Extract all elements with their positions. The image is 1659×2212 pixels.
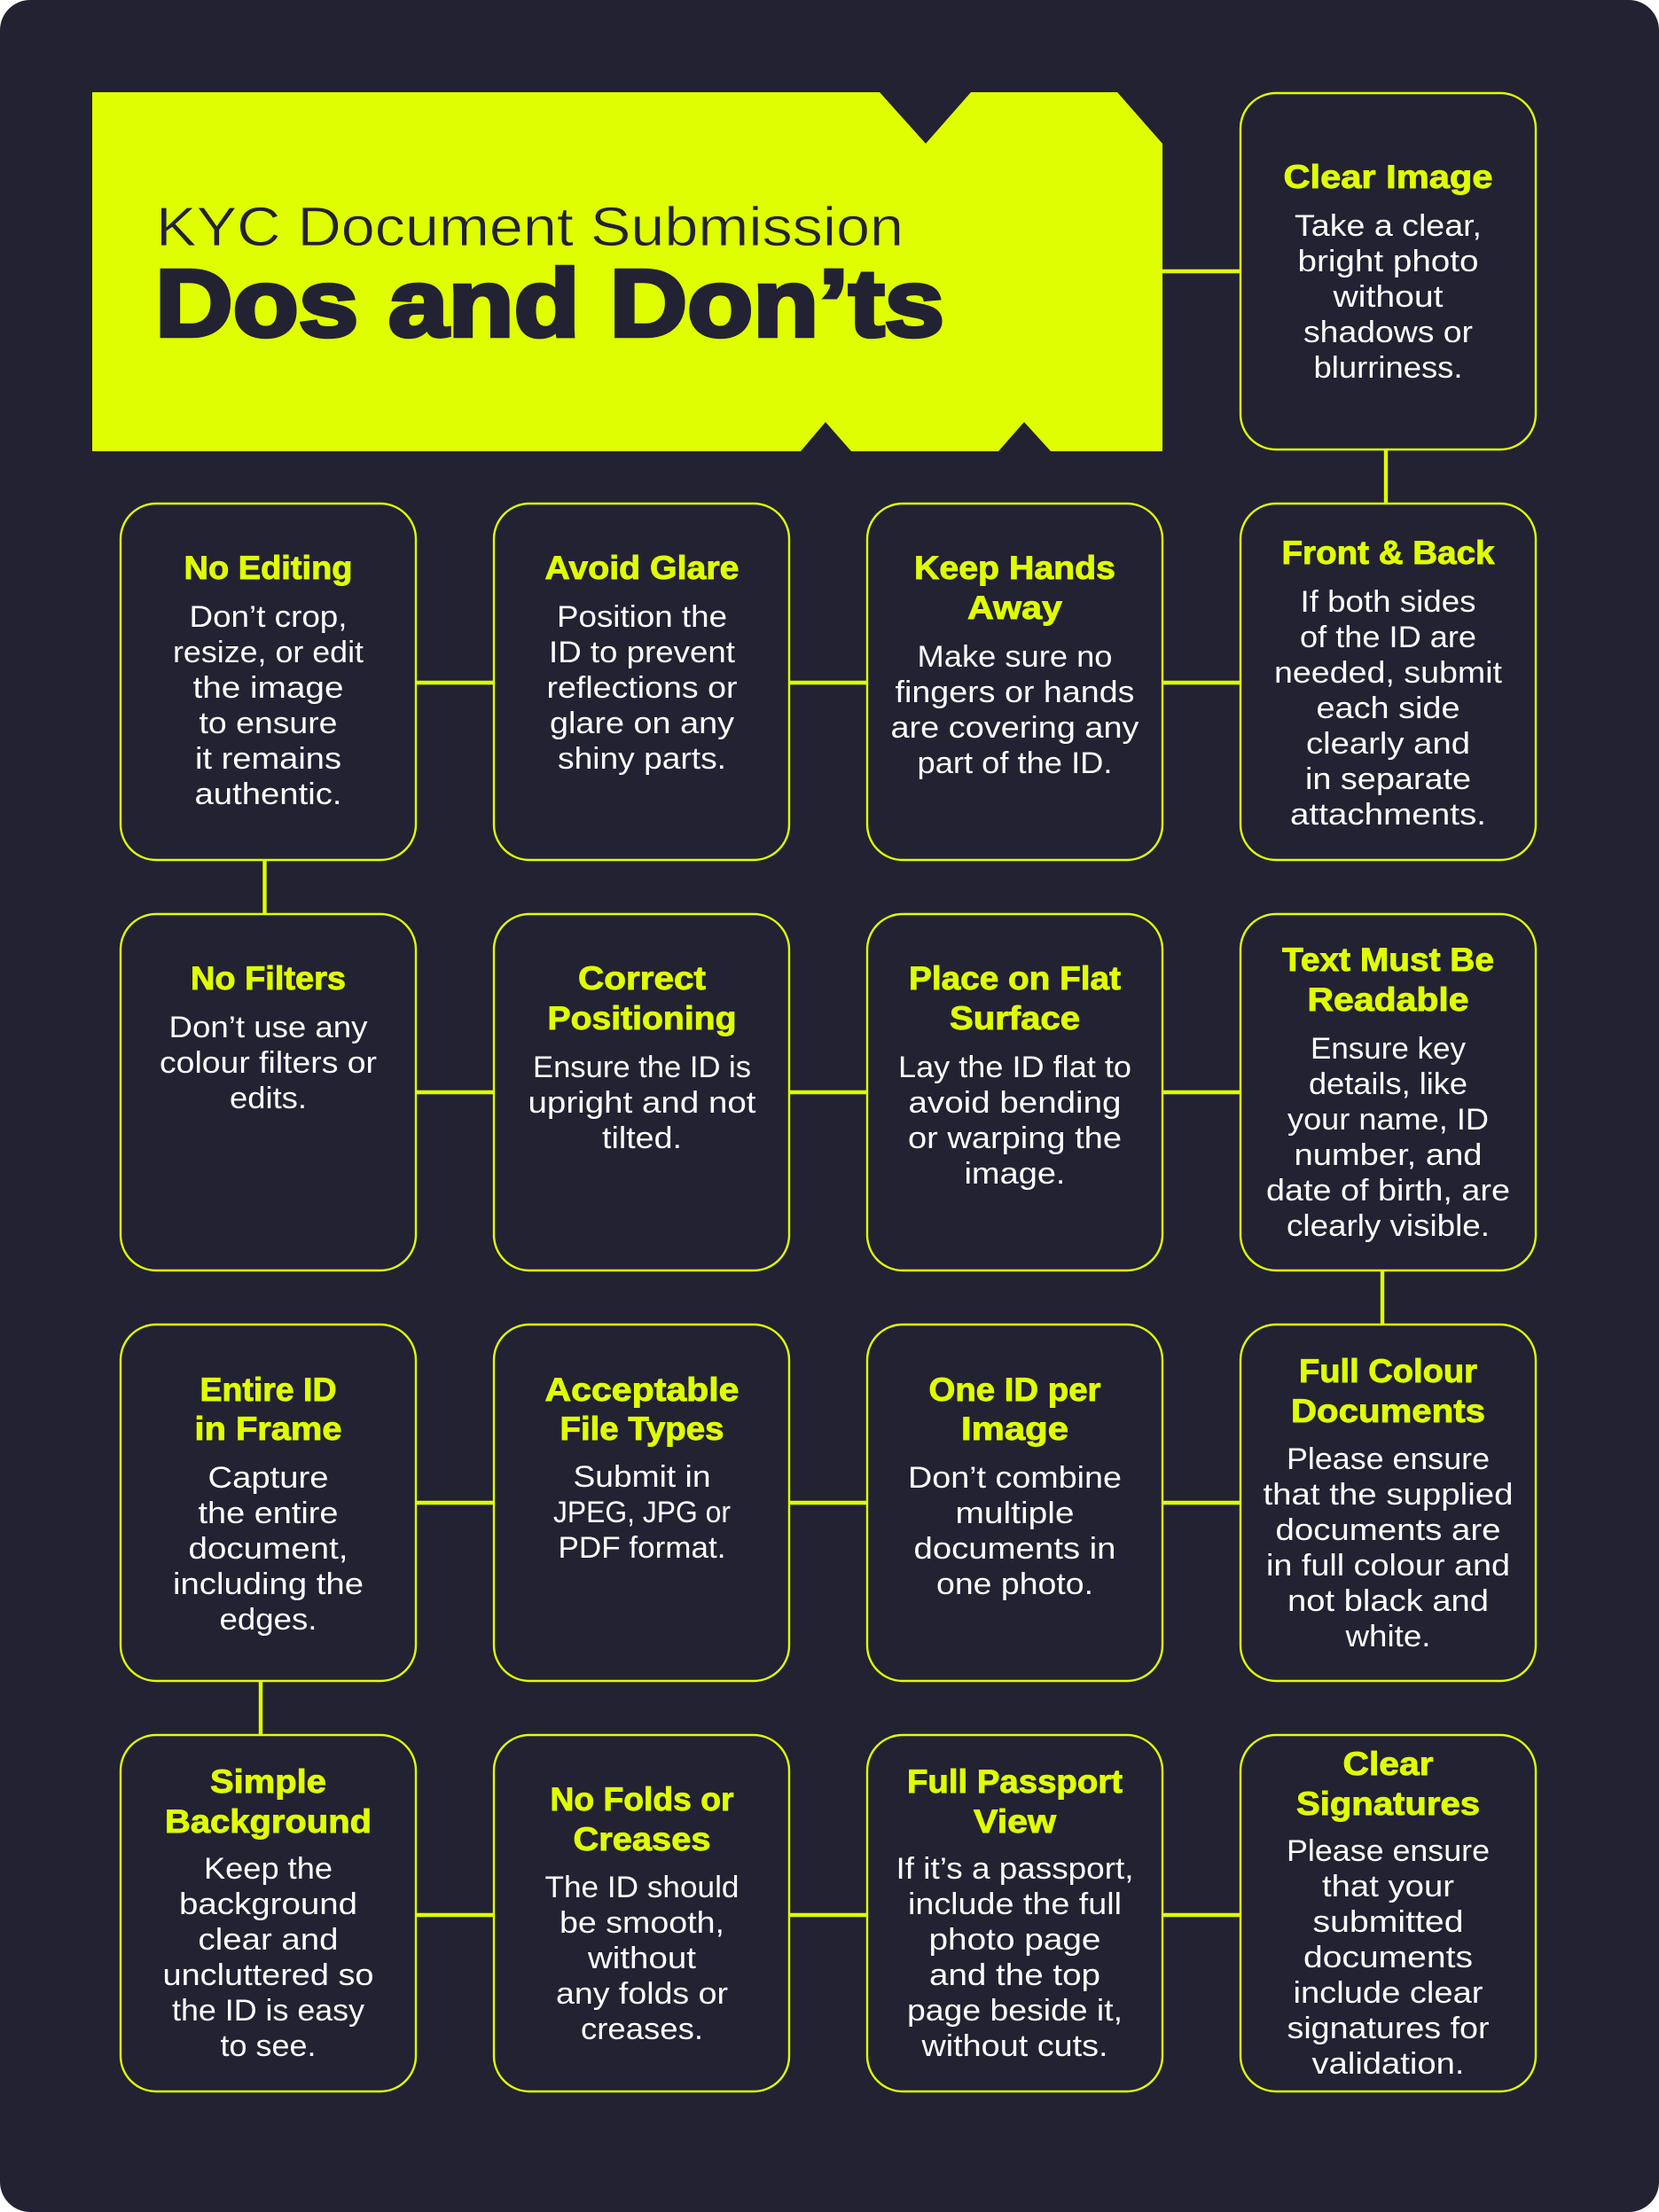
body text: Please ensure [1287,1442,1490,1476]
body text: edits. [230,1082,307,1115]
heading: Creases [573,1821,711,1857]
card: Full Passport View [867,1735,1162,2091]
body text: blurriness. [1314,351,1463,385]
heading [165,1763,372,1840]
body text: upright and not [528,1086,756,1120]
body text [1263,1442,1513,1653]
body text: reflections or [546,671,738,705]
body text: in separate [1305,762,1471,796]
card: Clear Image [1240,93,1536,449]
body text: including the [173,1567,364,1601]
heading: Correct [578,960,706,997]
heading: Positioning [548,1000,736,1036]
heading [1296,1746,1480,1822]
body text: to ensure [199,707,337,740]
card: No Editing [121,504,416,860]
body text [890,640,1139,780]
body text: include the full [908,1888,1122,1921]
heading: Simple [210,1763,326,1800]
heading: Image [961,1411,1068,1447]
body text: Please ensure [1287,1834,1490,1868]
body text: validation. [1312,2047,1465,2081]
body text: include clear [1293,1976,1483,2010]
card: Text Must Be Readable [1240,914,1536,1270]
heading [1291,1353,1485,1429]
body text [173,1461,364,1637]
body text: the image [193,671,344,705]
body text: the ID is easy [172,1994,364,2028]
body text: and the top [929,1958,1100,1992]
body text: Submit in [573,1460,711,1494]
body text: photo page [929,1923,1101,1957]
body text: submitted [1312,1905,1463,1939]
heading [909,960,1121,1036]
heading: Signatures [1296,1786,1480,1822]
body text: the entire [199,1497,339,1530]
heading: No Filters [191,960,346,997]
body text: documents in [913,1532,1115,1566]
body text: tilted. [602,1122,682,1155]
body text [896,1852,1133,2063]
card: Full Colour Documents [1240,1325,1536,1681]
body text: clearly and [1306,727,1470,761]
heading: View [974,1803,1056,1840]
body text: are covering any [890,711,1139,745]
body text: Make sure no [917,640,1112,674]
body text: resize, or edit [173,636,364,669]
body text: If it’s a passport, [896,1852,1133,1886]
body text: date of birth, are [1266,1174,1510,1208]
body text: in full colour and [1266,1549,1510,1583]
body text: The ID should [544,1871,740,1904]
body text: or warping the [908,1122,1122,1155]
banner shape [92,92,1162,451]
body text [1266,1032,1510,1243]
body text: glare on any [550,707,734,740]
body text [173,600,364,811]
card: Place on Flat Surface [867,914,1162,1270]
card: Clear Signatures [1240,1735,1536,2091]
body text: PDF format. [559,1531,725,1565]
body text: image. [965,1157,1066,1191]
body text: fingers or hands [896,676,1135,709]
body text: shiny parts. [558,742,726,776]
body text: document, [188,1532,348,1566]
heading: No Editing [184,550,353,586]
heading: Clear [1342,1746,1433,1782]
card: Acceptable File Types [494,1325,789,1681]
body text: page beside it, [907,1994,1123,2028]
heading: Full Colour [1299,1353,1477,1389]
body text [908,1461,1122,1601]
heading: Readable [1307,981,1468,1018]
body text [544,1871,740,2046]
body text: attachments. [1290,798,1486,832]
title banner [92,92,1162,451]
body text: Take a clear, [1295,209,1482,243]
heading: Away [967,590,1062,626]
heading: Keep Hands [914,550,1115,586]
body text: If both sides [1300,585,1475,619]
title line 2: Dos and Don’ts [155,249,944,356]
heading: Clear Image [1284,159,1493,195]
card: No Filters [121,914,416,1270]
body text: JPEG, JPG or [553,1496,731,1529]
heading: Surface [950,1000,1080,1036]
card: One ID per Image [867,1325,1162,1681]
body text: colour filters or [160,1046,377,1080]
body text: shadows or [1303,316,1473,349]
body text: white. [1344,1620,1431,1653]
heading [195,1372,342,1447]
card: No Folds or Creases [494,1735,789,2091]
body text: your name, ID [1287,1103,1489,1137]
body text [553,1460,731,1565]
body text: authentic. [195,778,342,811]
body text: Capture [207,1461,328,1495]
body text: multiple [956,1497,1075,1530]
body text [546,600,738,776]
title line 1: KYC Document Submission [156,197,904,258]
card: Correct Positioning [494,914,789,1270]
heading: Documents [1291,1393,1485,1429]
body text: background [179,1888,357,1921]
heading: Place on Flat [909,960,1121,997]
card: Avoid Glare [494,504,789,860]
body text: Position the [557,600,727,634]
body text: any folds or [556,1977,728,2011]
body text: details, like [1309,1067,1467,1101]
body text: clear and [199,1923,339,1957]
body text: be smooth, [560,1906,724,1940]
card: Simple Background [121,1735,416,2091]
body text [163,1852,374,2063]
body text: Ensure key [1311,1032,1466,1066]
heading [1282,942,1494,1018]
body text: creases. [581,2013,703,2046]
body text: Don’t combine [908,1461,1122,1495]
body text [898,1051,1131,1191]
body text: uncluttered so [163,1958,374,1992]
heading [929,1372,1101,1447]
heading [907,1763,1123,1840]
body text: Don’t crop, [190,600,348,634]
heading: Avoid Glare [544,550,740,586]
body text: clearly visible. [1287,1209,1490,1243]
body text [1274,585,1503,832]
heading: One ID per [929,1372,1101,1408]
heading: Background [165,1803,372,1840]
body text: without [587,1942,697,1975]
body text: not black and [1287,1584,1489,1618]
body text: needed, submit [1274,656,1503,690]
body text: without cuts. [920,2029,1108,2063]
body text: Lay the ID flat to [898,1051,1131,1084]
body text: each side [1316,692,1459,725]
body text: to see. [220,2029,316,2063]
body text: avoid bending [908,1086,1121,1120]
body text: documents are [1275,1513,1500,1547]
body text [1295,209,1482,385]
body text: it remains [195,742,341,776]
heading [914,550,1115,626]
body text: without [1332,280,1444,314]
body text: Don’t use any [168,1011,367,1044]
body text: part of the ID. [917,746,1112,780]
body text [1287,1834,1490,2081]
body text: that the supplied [1263,1478,1513,1512]
body text: number, and [1295,1138,1483,1172]
body text [528,1051,756,1155]
body text: documents [1303,1941,1473,1974]
heading: Entire ID [200,1372,337,1408]
body text [160,1011,377,1115]
body text: Keep the [204,1852,333,1886]
card: Entire ID in Frame [121,1325,416,1681]
body text: one photo. [936,1567,1093,1601]
body text: signatures for [1287,2012,1490,2045]
body text: Ensure the ID is [533,1051,751,1084]
card: Front & Back [1240,504,1536,860]
heading: Text Must Be [1282,942,1494,978]
heading: Acceptable [544,1372,740,1408]
body text: that your [1322,1870,1454,1903]
heading: Front & Back [1282,535,1495,571]
body text: edges. [220,1603,317,1637]
body text: bright photo [1298,245,1479,278]
body text: ID to prevent [549,636,736,669]
card: Keep Hands Away [867,504,1162,860]
connectors between cards [261,271,1386,1915]
body text: of the ID are [1300,621,1476,654]
heading: File Types [560,1411,724,1447]
heading: No Folds or [550,1781,734,1817]
heading [548,960,736,1036]
heading: Full Passport [907,1763,1123,1800]
heading [550,1781,734,1857]
heading: in Frame [195,1411,342,1447]
heading [544,1372,740,1447]
